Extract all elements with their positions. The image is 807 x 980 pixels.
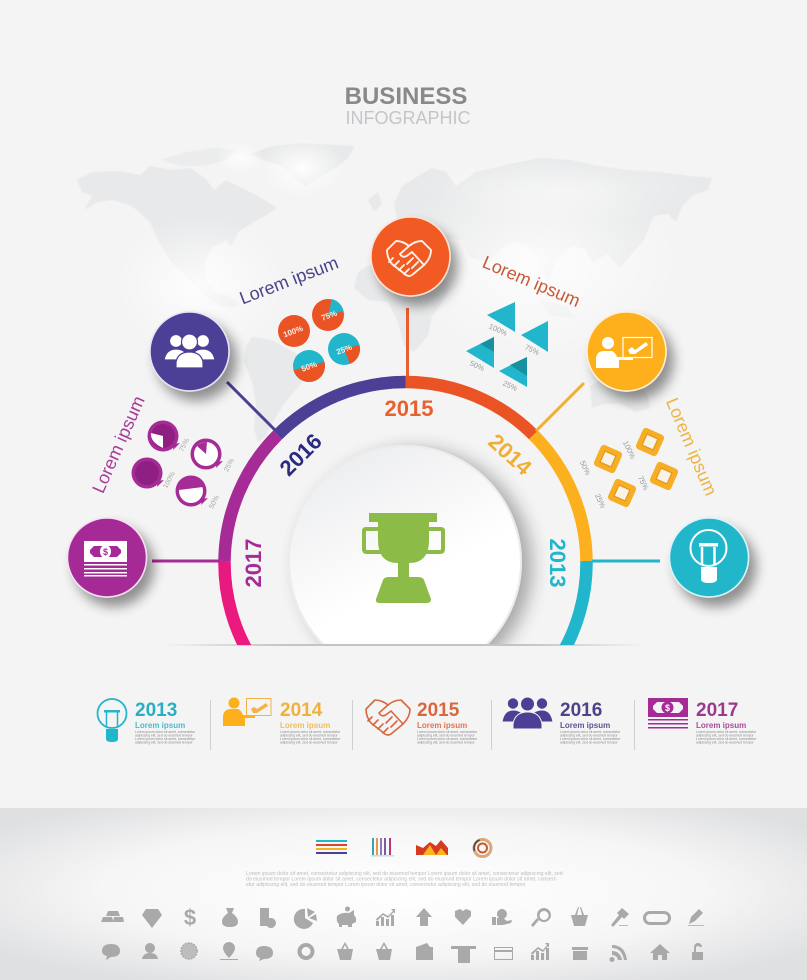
- legend item: 2014: 2014: [280, 700, 323, 721]
- legend item: 2016: adipiscing elit, sed do eiusmod tempor: [560, 740, 619, 744]
- year labels on arc: 2014: [483, 429, 537, 481]
- circle: team: [150, 312, 229, 391]
- yellow square charts: 100%: [621, 439, 638, 461]
- yellow square charts: 50%: [578, 459, 593, 477]
- icon: padlock open: [692, 943, 703, 960]
- icon: coin stack: [260, 908, 276, 928]
- icon: magnifier: [531, 908, 551, 927]
- title: BUSINESS: [345, 83, 467, 110]
- legend item: 2017: adipiscing elit, sed do eiusmod tempor: [696, 740, 755, 744]
- icon: hand coin: [492, 909, 512, 925]
- icon: gold bars: [101, 911, 124, 922]
- icon: money: $: [665, 703, 670, 713]
- circle: handshake: [371, 217, 450, 296]
- trophy: [364, 513, 443, 603]
- paragraph: [246, 871, 563, 888]
- title: [345, 83, 471, 128]
- icon: gift: [572, 947, 588, 960]
- yellow square charts: [578, 427, 679, 510]
- legend item: 2016: Lorem ipsum: [560, 721, 610, 730]
- icon: bulb: [98, 699, 126, 742]
- small chart: area peaks: [416, 840, 448, 855]
- legend item: 2016: Lorem ipsum dolor sit amet, consectetur: [560, 737, 621, 741]
- icon: pie chart: [294, 908, 317, 929]
- legend item: 2016: [502, 697, 621, 744]
- legend item: 2013: adipiscing elit, sed do eiusmod tempor: [135, 740, 194, 744]
- icon row 2: [102, 942, 703, 963]
- legend dividers: [210, 700, 635, 750]
- icon: location pin: [220, 942, 238, 960]
- magenta pointer charts: 50%: [208, 494, 221, 510]
- legend item: 2015: 2015: [417, 700, 460, 721]
- icon: team: [502, 697, 553, 729]
- center plate: [289, 446, 521, 678]
- legend item: 2014: adipiscing elit, sed do eiusmod tempor: [280, 740, 339, 744]
- icon: home: [650, 944, 670, 960]
- arc segment 2017: [224, 435, 278, 660]
- icon: diamond: [142, 909, 162, 928]
- title: INFOGRAPHIC: [345, 108, 471, 128]
- icon: handshake: [455, 909, 471, 925]
- legend item: 2014: Lorem ipsum: [280, 721, 330, 730]
- year labels on arc: 2013: [545, 539, 570, 587]
- arc segment 2014: [534, 435, 586, 561]
- orange pie charts: 100%: [282, 324, 304, 339]
- year labels on arc: 2017: [241, 539, 266, 587]
- icon: dollar: $: [184, 905, 196, 930]
- orange pie charts: 75%: [320, 309, 338, 323]
- legend item: 2017: Lorem ipsum dolor sit amet, consectetur: [696, 737, 757, 741]
- legend item: 2015: Lorem ipsum dolor sit amet, consectetur: [417, 730, 478, 734]
- arc segment 2013: [558, 561, 587, 660]
- icon: credit card: [494, 947, 513, 960]
- small chart: horizontal bars: [316, 840, 347, 854]
- year labels on arc: [241, 396, 570, 587]
- small chart: donut: [472, 840, 491, 856]
- legend item: 2014: adipiscing elit, sed do eiusmod tempor: [280, 734, 339, 738]
- cyan triangle charts: 50%: [468, 358, 486, 373]
- circle: presenter: [587, 312, 666, 391]
- paragraph: do eiusmod tempor Lorem ipsum dolor sit amet, consectetur adipiscing elit, sed do eiusmod tempor Lorem ipsum dolor sit amet, consect-: [246, 876, 558, 882]
- legend item: 2016: 2016: [560, 700, 602, 721]
- legend item: 2015: adipiscing elit, sed do eiusmod tempor: [417, 740, 476, 744]
- legend item: 2015: Lorem ipsum: [417, 721, 467, 730]
- legend item: 2013: [98, 699, 196, 744]
- icon: piggy bank: [337, 906, 356, 927]
- small chart: vertical bars: [371, 838, 394, 856]
- legend item: 2013: Lorem ipsum: [135, 721, 185, 730]
- timeline arc: [224, 382, 587, 660]
- map highlights: [115, 138, 700, 360]
- icon: growth chart: [531, 943, 549, 960]
- icon row 1: [101, 905, 704, 930]
- cyan triangle charts: 100%: [487, 322, 509, 338]
- legend item: 2013: Lorem ipsum dolor sit amet, consectetur: [135, 737, 196, 741]
- icon: growth chart: [376, 909, 395, 926]
- magenta pointer charts: 25%: [223, 457, 236, 473]
- bottom band: [0, 808, 807, 980]
- year labels on arc: 2016: [275, 429, 327, 481]
- legend item: 2013: adipiscing elit, sed do eiusmod tempor: [135, 734, 194, 738]
- legend item: 2017: Lorem ipsum: [696, 721, 746, 730]
- icon: chat double: [256, 946, 273, 961]
- legend item: 2017: 2017: [696, 700, 738, 721]
- legend item: 2017: adipiscing elit, sed do eiusmod tempor: [696, 734, 755, 738]
- legend item: 2017: [648, 698, 757, 744]
- paragraph: etur adipiscing elit, sed do eiusmod tempor Lorem ipsum dolor sit amet, consectetur adipiscing elit, sed do eiusmod tempor: [246, 882, 526, 888]
- icon: rss: [609, 945, 627, 962]
- arc segment 2015: [406, 382, 534, 435]
- orange pie charts: 25%: [335, 343, 353, 357]
- legend item: 2015: [366, 700, 478, 744]
- section heading: 2017: Lorem ipsum: [88, 393, 149, 496]
- legend item: 2015: adipiscing elit, sed do eiusmod tempor: [417, 734, 476, 738]
- yellow square charts: 75%: [636, 474, 651, 492]
- orange pie charts: 50%: [300, 360, 318, 374]
- connector lines: [152, 308, 660, 561]
- circle: money: $: [103, 547, 108, 557]
- section heading: 2014: Lorem ipsum: [662, 395, 721, 498]
- magenta pointer charts: 75%: [178, 437, 191, 453]
- cyan triangle charts: 75%: [523, 342, 541, 357]
- section heading: 2015: Lorem ipsum: [480, 252, 583, 311]
- legend item: 2014: [223, 698, 341, 744]
- icon: pen: [688, 909, 704, 926]
- legend item: 2016: Lorem ipsum dolor sit amet, consectetur: [560, 730, 621, 734]
- magenta pointer charts: 100%: [162, 471, 177, 490]
- section heading: 2016: Lorem ipsum: [237, 252, 341, 308]
- circle: money: [68, 518, 146, 597]
- legend item: 2016: adipiscing elit, sed do eiusmod tempor: [560, 734, 619, 738]
- legend item: 2015: Lorem ipsum dolor sit amet, consectetur: [417, 737, 478, 741]
- world map: [77, 143, 712, 443]
- icon: gavel: [611, 908, 629, 927]
- year labels on arc: 2015: [385, 396, 433, 421]
- icon: basket minus: [376, 942, 392, 960]
- icon: basket: [571, 907, 588, 926]
- icon: currency exchange: [643, 911, 671, 925]
- icon: ATM: [451, 946, 476, 963]
- legend item: 2014: Lorem ipsum dolor sit amet, consectetur: [280, 737, 341, 741]
- legend item: 2017: Lorem ipsum dolor sit amet, consectetur: [696, 730, 757, 734]
- orange pie charts: [278, 299, 360, 382]
- magenta pointer charts: [132, 420, 236, 510]
- cyan triangle charts: [466, 302, 548, 393]
- legend item: 2013: 2013: [135, 700, 177, 721]
- legend item: 2014: Lorem ipsum dolor sit amet, consectetur: [280, 730, 341, 734]
- icon: chat bubble: [102, 944, 120, 960]
- icon: 24 hours: [297, 943, 314, 960]
- ground shadow: [165, 644, 645, 646]
- icon: user: [142, 943, 158, 959]
- icon: basket plus: [337, 942, 353, 960]
- legend item: 2013: Lorem ipsum dolor sit amet, consectetur: [135, 730, 196, 734]
- icon: money bag: [222, 908, 238, 927]
- icon: wallet: [416, 943, 433, 960]
- icon: presenter: [223, 698, 271, 726]
- yellow square charts: 25%: [593, 492, 608, 510]
- icon: globe: [181, 943, 197, 959]
- arc segment 2016: [278, 382, 406, 435]
- circle: bulb: [670, 518, 748, 597]
- paragraph: Lorem ipsum dolor sit amet, consectetur adipiscing elit, sed do eiusmod tempor Lorem ipsum dolor sit amet, consectetur adipiscing elit, sed: [246, 871, 563, 877]
- icon: handshake: [366, 700, 410, 735]
- icon: upload house dollar: [416, 908, 432, 926]
- cyan triangle charts: 25%: [501, 378, 519, 393]
